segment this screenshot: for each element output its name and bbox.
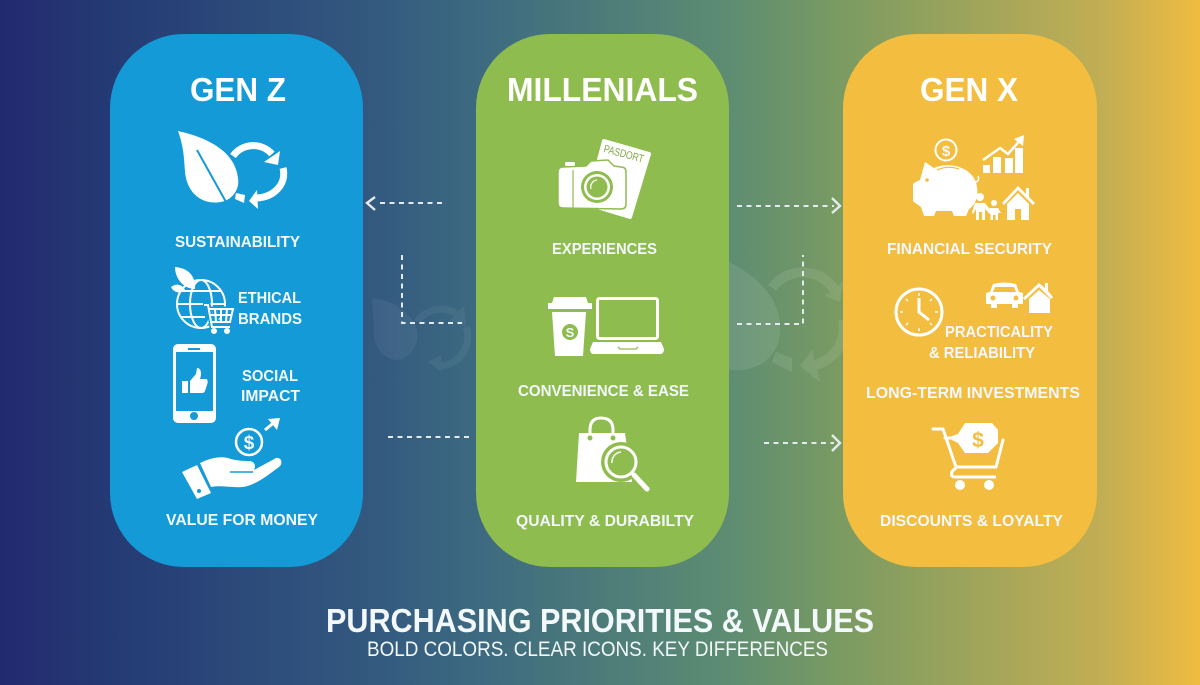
connector: right elbow [737, 255, 803, 324]
icon: shopping cart with price tag: $ [972, 429, 984, 452]
icon: hand with coin: $ [244, 433, 255, 454]
icon: piggy bank, growth chart, family and house [913, 135, 1035, 220]
panel: Gen X [843, 34, 1097, 567]
connector: top right arrow [737, 198, 840, 213]
icon: piggy bank, growth chart, family and house: $ [942, 143, 951, 160]
icon: coffee cup and laptop: S [566, 325, 575, 340]
panel: Gen Z [110, 34, 363, 567]
label: practicality and reliability [929, 324, 1053, 362]
label: discounts and loyalty: DISCOUNTS & LOYALTY [880, 513, 1063, 530]
label: ethical brands: BRANDS [238, 311, 302, 328]
label: social impact: SOCIAL [242, 368, 298, 385]
label: sustainability: SUSTAINABILITY [175, 234, 300, 251]
heading: Millenials: MILLENIALS [507, 71, 698, 108]
panel: Millennials [476, 34, 729, 567]
icon: shopping cart with price tag [933, 423, 1003, 490]
subtitle: BOLD COLORS. CLEAR ICONS. KEY DIFFERENCES [367, 638, 828, 661]
label: quality and durability: QUALITY & DURABILTY [516, 513, 694, 530]
connector: left elbow [402, 255, 462, 323]
connector: bottom right arrow [764, 435, 840, 451]
label: practicality and reliability: PRACTICALITY [945, 324, 1053, 341]
label: ethical brands: ETHICAL [238, 290, 301, 307]
heading: Gen X: GEN X [920, 71, 1018, 108]
icon: camera and passport: PASDORT [602, 143, 645, 166]
label: social impact: IMPACT [241, 388, 300, 405]
heading: Gen Z: GEN Z [190, 71, 286, 108]
icon: clock [896, 289, 942, 335]
label: practicality and reliability: & RELIABILITY [929, 345, 1035, 362]
label: financial security: FINANCIAL SECURITY [887, 241, 1052, 258]
watermark: left leaf and recycle [372, 298, 468, 372]
label: value for money: VALUE FOR MONEY [166, 512, 318, 529]
label: long-term investments: LONG-TERM INVESTMENTS [866, 385, 1080, 402]
label: convenience and ease: CONVENIENCE & EASE [518, 383, 689, 400]
label: experiences: EXPERIENCES [552, 241, 657, 258]
icon: leaf and recycle [178, 131, 284, 209]
icon: coffee cup and laptop [548, 297, 664, 356]
icon: car and house [986, 282, 1053, 313]
icon: hand with coin [182, 418, 281, 499]
label: social impact [241, 368, 300, 405]
title: PURCHASING PRIORITIES & VALUES [326, 602, 874, 639]
connector: bottom left dashes [388, 436, 470, 438]
watermark: right leaf and recycle [716, 256, 844, 382]
label: ethical brands [238, 290, 302, 328]
icon: shopping bag and magnifier [576, 418, 647, 489]
connector: top left arrow [367, 197, 442, 210]
icon: phone with thumbs up [173, 344, 216, 423]
icon: camera and passport [558, 141, 649, 217]
icon: globe and cart [171, 267, 234, 333]
